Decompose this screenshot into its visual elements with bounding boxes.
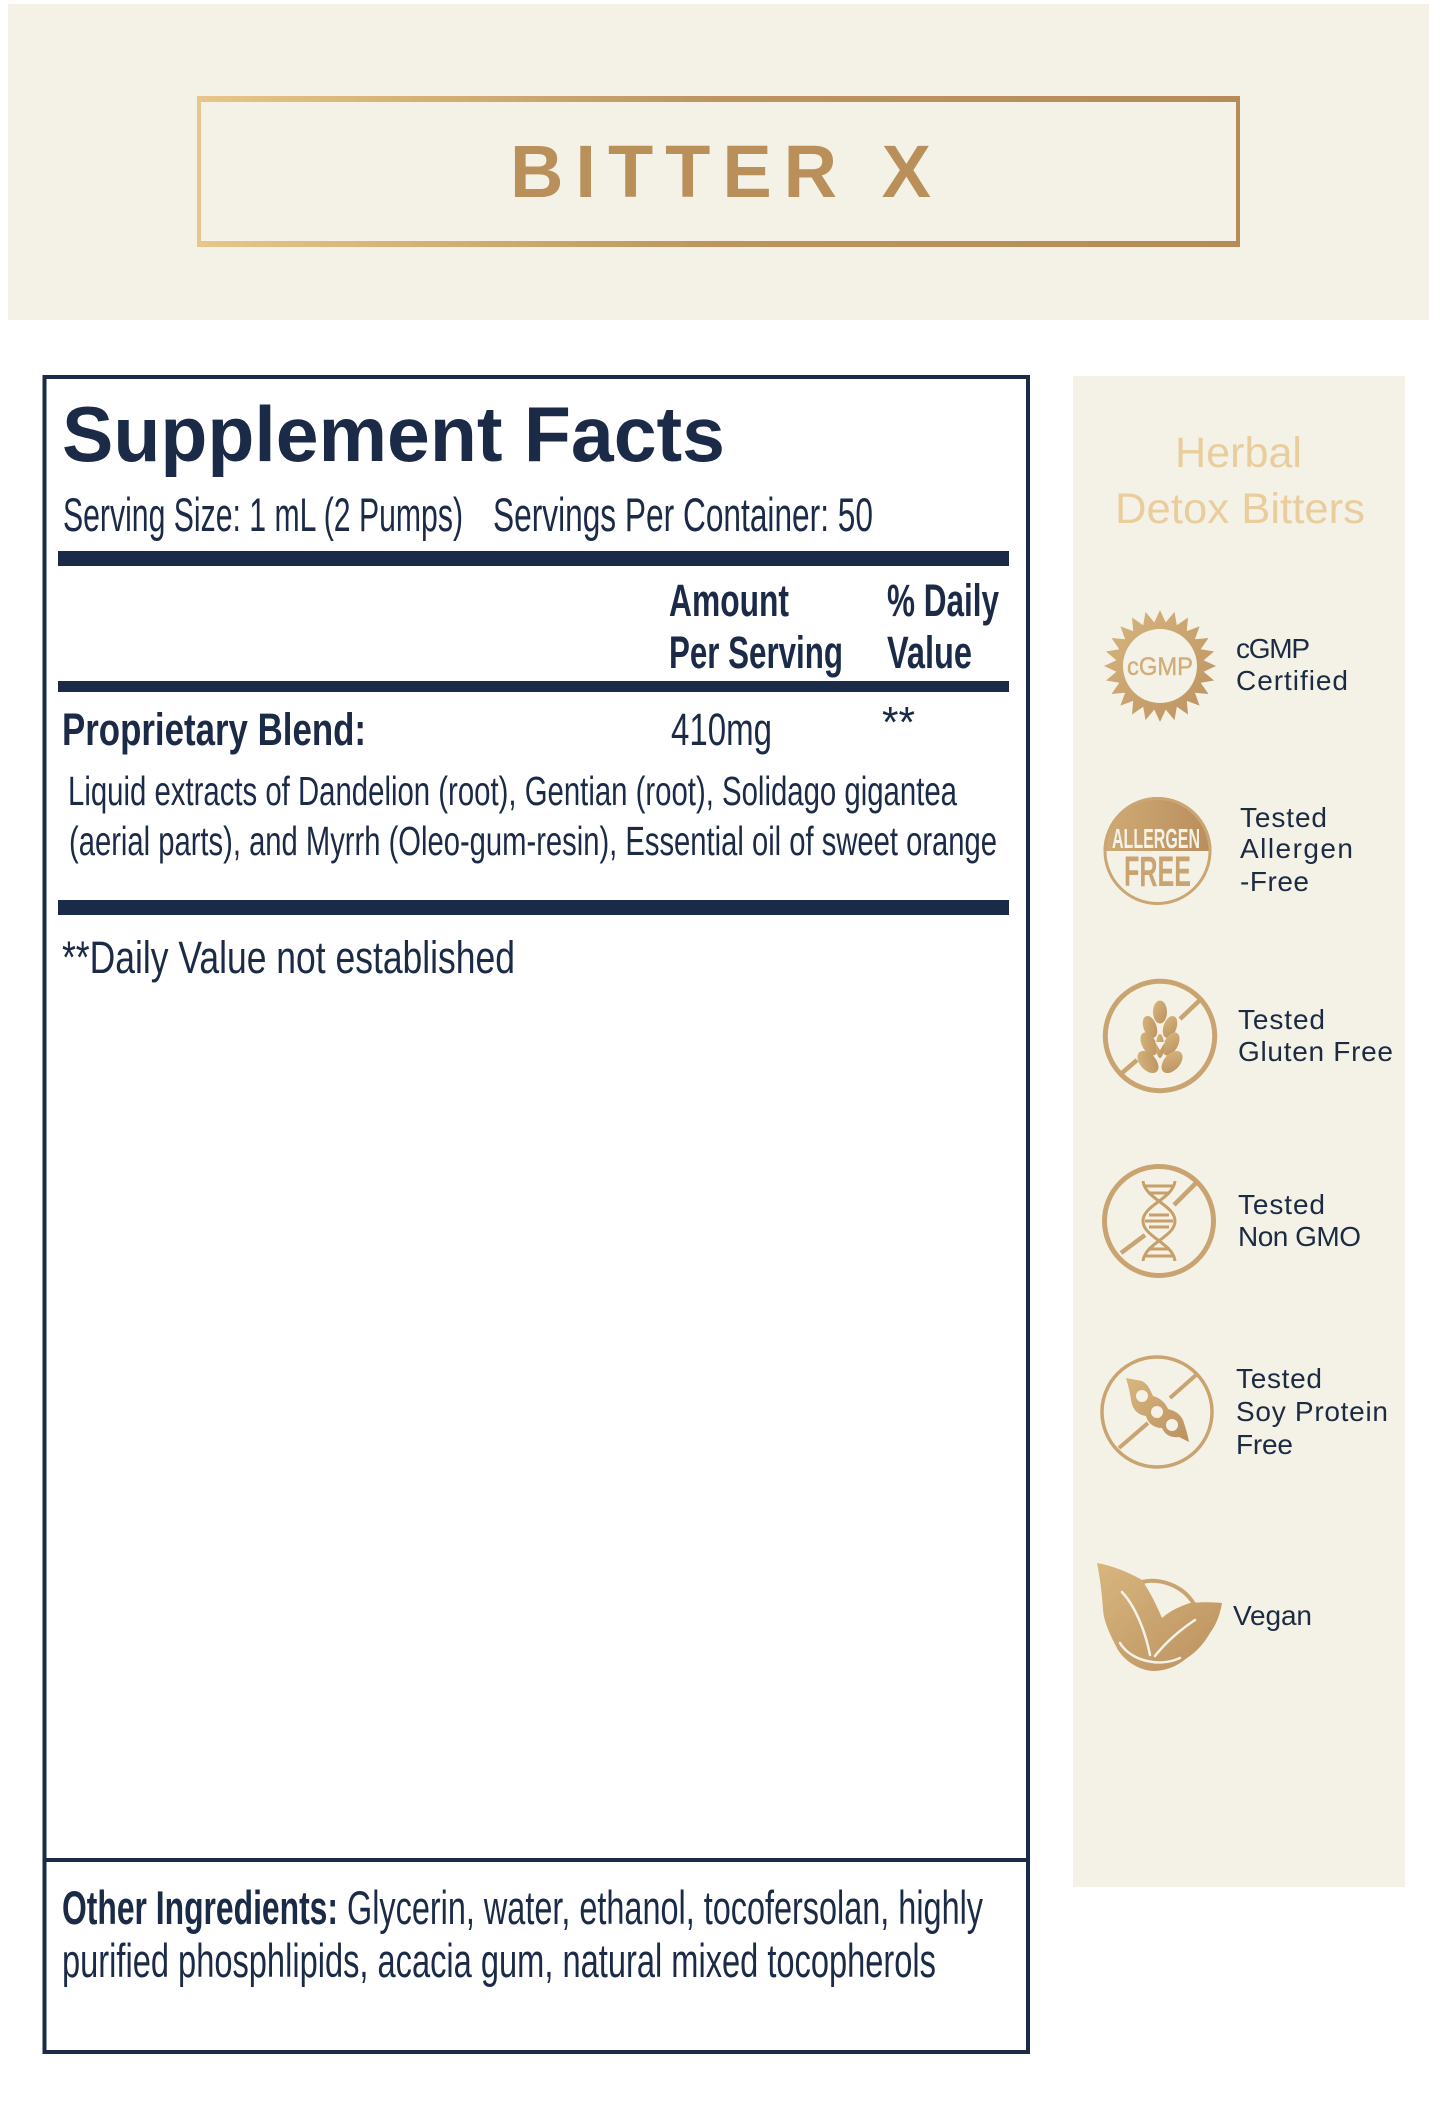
label: tested gluten free: Gluten Free	[1238, 1036, 1393, 1067]
icon: vegan leaves	[1097, 1563, 1222, 1671]
other ingredients: Other Ingredients:	[62, 1881, 338, 1934]
header rule	[58, 681, 1009, 692]
blend ingredients: Liquid extracts of Dandelion (root), Gentian (root), Solidago gigantea	[68, 768, 957, 814]
icon: allergen free	[1104, 797, 1212, 904]
lower rule	[58, 900, 1009, 915]
blend ingredients	[68, 768, 997, 864]
other ingredients: purified phosphlipids, acacia gum, natural mixed tocopherols	[62, 1934, 936, 1987]
other ingredients	[62, 1881, 983, 1987]
top rule	[58, 551, 1009, 566]
panel: supplement facts	[43, 377, 1030, 2052]
icon: gluten free wheat	[1105, 981, 1215, 1091]
label: cGMP certified: Certified	[1236, 665, 1348, 696]
row daily value: **	[882, 698, 915, 747]
icon: allergen free: FREE	[1124, 848, 1191, 896]
label: tested non GMO: Non GMO	[1238, 1221, 1361, 1252]
icon: non GMO DNA	[1104, 1166, 1214, 1276]
label: tested allergen free: Allergen	[1240, 833, 1353, 864]
icon: soy protein free	[1102, 1357, 1212, 1467]
servings per container: Servings Per Container: 50	[493, 488, 873, 541]
icon: allergen free: ALLERGEN	[1112, 823, 1200, 854]
heading: supplement facts: Supplement Facts	[62, 390, 725, 478]
label: tested allergen free	[1240, 802, 1353, 897]
column header: amount per serving	[669, 575, 843, 678]
label: cGMP certified: cGMP	[1236, 633, 1310, 664]
column header: percent daily value	[887, 575, 999, 678]
label: tested soy protein free: Soy Protein	[1236, 1396, 1388, 1427]
column header: percent daily value: Value	[887, 627, 972, 678]
title: BITTER X	[510, 130, 931, 213]
sidebar heading	[1115, 429, 1365, 533]
label: tested gluten free	[1238, 1004, 1393, 1067]
title frame	[197, 96, 1240, 247]
icon: cGMP seal: cGMP	[1127, 653, 1193, 681]
column header: amount per serving: Per Serving	[669, 627, 843, 678]
label: vegan: Vegan	[1233, 1600, 1312, 1631]
serving size: Serving Size: 1 mL (2 Pumps)	[63, 488, 463, 541]
other ingredients: Glycerin, water, ethanol, tocofersolan, highly	[347, 1881, 983, 1934]
row amount: 410mg: 410mg	[671, 704, 772, 755]
label: cGMP certified	[1236, 633, 1348, 696]
column header: amount per serving: Amount	[669, 575, 789, 626]
column header: percent daily value: % Daily	[887, 575, 999, 626]
divider	[43, 1858, 1030, 1862]
sidebar heading: Herbal	[1175, 429, 1302, 477]
sidebar heading: Detox Bitters	[1115, 485, 1365, 533]
label: tested allergen free: Tested	[1240, 802, 1327, 833]
label: tested non GMO: Tested	[1238, 1189, 1325, 1220]
row: proprietary blend: Proprietary Blend:	[62, 704, 366, 755]
label: tested soy protein free: Tested	[1236, 1363, 1322, 1394]
label: tested non GMO	[1238, 1189, 1361, 1252]
label: tested soy protein free	[1236, 1363, 1388, 1460]
label: tested allergen free: -Free	[1240, 866, 1309, 897]
panel: title banner	[8, 4, 1429, 320]
icon: cGMP seal	[1104, 610, 1216, 722]
label: tested gluten free: Tested	[1238, 1004, 1325, 1035]
panel: product attributes	[1073, 376, 1405, 1887]
blend ingredients: (aerial parts), and Myrrh (Oleo-gum-resin), Essential oil of sweet orange	[69, 818, 997, 864]
footnote: **Daily Value not established	[62, 932, 515, 983]
label: tested soy protein free: Free	[1236, 1429, 1293, 1460]
